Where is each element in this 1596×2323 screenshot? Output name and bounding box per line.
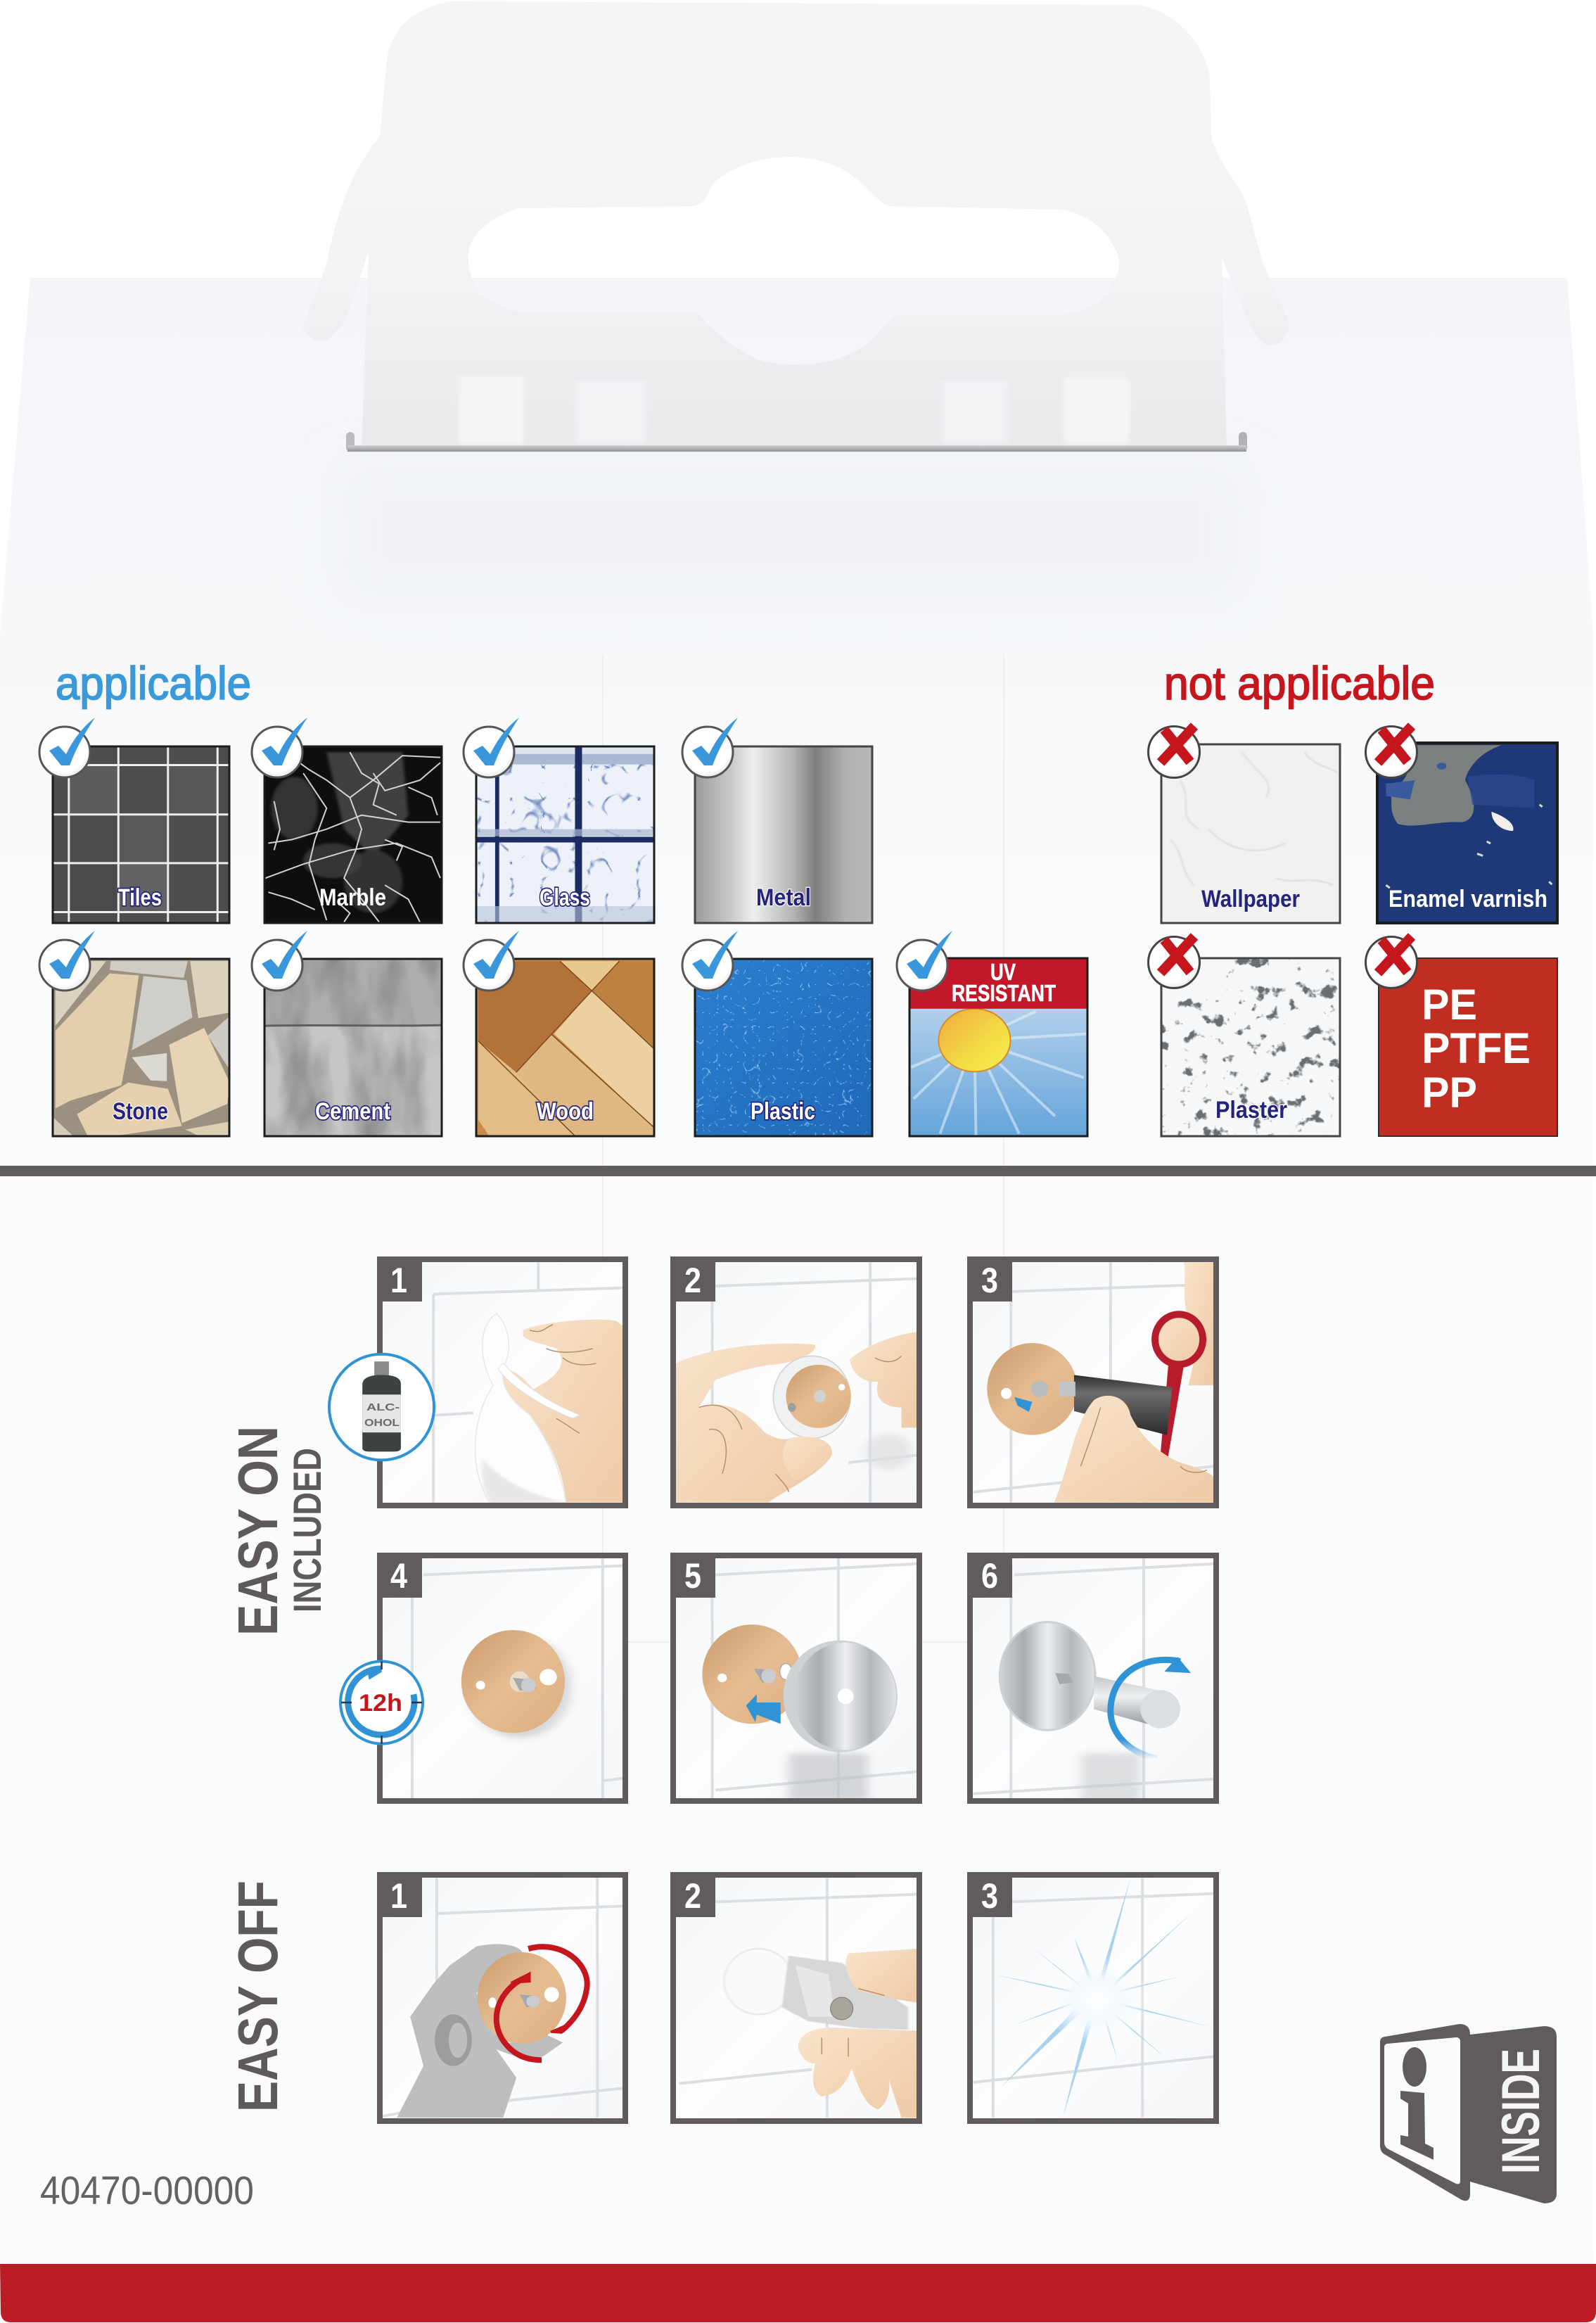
tile: UV resistant bbox=[909, 958, 1087, 1136]
hanger shadow bbox=[338, 464, 1245, 605]
tile: Cement bbox=[264, 959, 442, 1136]
tile: PE PTFE PP bbox=[1379, 958, 1557, 1136]
icon: alcohol bottle: OHOL bbox=[364, 1417, 400, 1429]
tile: Glass bbox=[476, 746, 654, 923]
hang tab bbox=[302, 1, 1289, 452]
step number: 3 bbox=[981, 1876, 998, 1916]
tile: Enamel varnish: Enamel varnish bbox=[1388, 886, 1547, 912]
tile: Wood bbox=[476, 959, 654, 1137]
step on 1: wipe with cloth bbox=[377, 1256, 628, 1508]
heading: not applicable: not applicable bbox=[1164, 657, 1435, 709]
icon: info inside: INSIDE bbox=[1491, 2049, 1551, 2174]
step number: 5 bbox=[684, 1556, 701, 1596]
step on 2: peel ring onto disc bbox=[670, 1256, 922, 1508]
step number: 2 bbox=[684, 1876, 701, 1916]
heading: applicable: applicable bbox=[56, 657, 251, 709]
tile: Stone: Stone bbox=[113, 1098, 168, 1125]
icon: 12h timer: 12h bbox=[359, 1690, 402, 1717]
red footer band bbox=[0, 2264, 1596, 2322]
tile: Wood: Wood bbox=[537, 1098, 594, 1125]
step on 4: copper disc, wait 12h bbox=[377, 1553, 628, 1805]
step number: 2 bbox=[684, 1261, 701, 1300]
step off 2: scrape pad off bbox=[670, 1872, 922, 2124]
tile: Metal bbox=[695, 746, 872, 923]
article number: 40470-00000 bbox=[40, 2168, 254, 2213]
panel: not applicable materials bbox=[1148, 657, 1557, 1136]
step number: 6 bbox=[981, 1556, 998, 1596]
step on 3: apply glue tube bbox=[967, 1256, 1219, 1508]
tile: PE PTFE PP: PE bbox=[1422, 981, 1477, 1029]
step number: 4 bbox=[390, 1556, 407, 1596]
step off 3: clean sparkle bbox=[967, 1872, 1219, 2124]
check badges bbox=[39, 718, 952, 991]
panel: applicable materials bbox=[39, 657, 1087, 1137]
tile: PE PTFE PP: PP bbox=[1422, 1069, 1477, 1116]
tile: Enamel varnish bbox=[1377, 743, 1557, 923]
tile: Glass: Glass bbox=[540, 884, 590, 911]
step on 6: twist to lock bbox=[967, 1553, 1219, 1805]
icon: 12h timer bbox=[340, 1661, 423, 1744]
divider bar bbox=[0, 1166, 1596, 1176]
tile: Plaster bbox=[1161, 958, 1340, 1136]
heading: EASY OFF: EASY OFF bbox=[226, 1880, 289, 2112]
step off 1: wrench twists disc bbox=[377, 1872, 628, 2124]
tile: UV resistant: RESISTANT bbox=[952, 980, 1056, 1006]
heading: EASY ON: EASY ON bbox=[226, 1426, 289, 1636]
tile: Tiles bbox=[53, 746, 230, 923]
heading: INCLUDED: INCLUDED bbox=[285, 1448, 329, 1612]
step on 5: press steel disc bbox=[670, 1553, 922, 1805]
tile: Metal: Metal bbox=[756, 884, 811, 911]
icon: alcohol bottle bbox=[329, 1354, 434, 1460]
tile: Plaster: Plaster bbox=[1215, 1097, 1287, 1124]
tile: Wallpaper bbox=[1161, 744, 1341, 923]
fold lines bbox=[603, 654, 1004, 1703]
step number: 1 bbox=[390, 1876, 407, 1916]
tile: Cement: Cement bbox=[315, 1098, 390, 1125]
tile: Plastic: Plastic bbox=[751, 1098, 815, 1125]
tile: Stone bbox=[53, 959, 230, 1137]
tile: Marble bbox=[264, 746, 442, 923]
cross badges bbox=[1148, 726, 1417, 988]
tile: PE PTFE PP: PTFE bbox=[1422, 1024, 1531, 1072]
step number: 1 bbox=[390, 1261, 407, 1300]
icon: info inside bbox=[1380, 2024, 1557, 2203]
tile: Marble: Marble bbox=[319, 884, 386, 911]
icon: alcohol bottle: ALC- bbox=[366, 1401, 400, 1413]
tile: Tiles: Tiles bbox=[118, 884, 162, 911]
tile: UV resistant: UV bbox=[990, 959, 1016, 985]
tile: Wallpaper: Wallpaper bbox=[1201, 886, 1300, 912]
step number: 3 bbox=[981, 1261, 998, 1300]
tile: Plastic bbox=[695, 959, 872, 1136]
